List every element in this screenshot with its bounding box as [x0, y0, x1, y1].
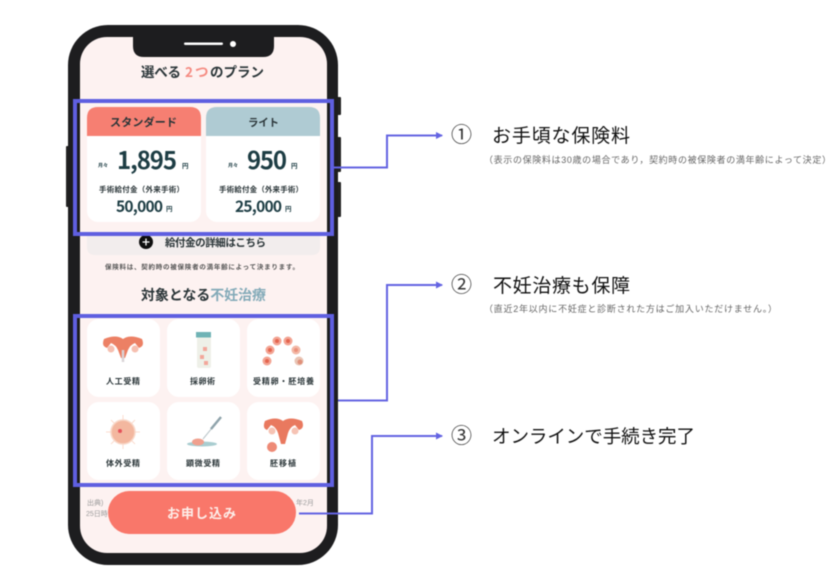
arrow: plans to point 1	[334, 136, 442, 168]
tile: in vitro fertilization	[87, 402, 160, 480]
phone side buttons	[66, 97, 341, 217]
point 3: ③	[451, 425, 472, 448]
title: つ	[195, 61, 208, 81]
phone notch	[133, 37, 274, 57]
standard monthly price: 月々	[98, 162, 108, 169]
icon: egg cell	[106, 415, 140, 449]
panel: standard plan	[87, 107, 201, 222]
icon: embryo stages	[262, 336, 304, 366]
tile: egg retrieval	[167, 319, 240, 397]
standard monthly price	[98, 141, 189, 176]
light monthly price: 月々	[228, 162, 238, 169]
light benefit label: 手術給付金（外来手術）	[219, 184, 303, 195]
point 1: ①	[451, 124, 472, 147]
standard benefit label: 手術給付金（外来手術）	[99, 184, 184, 195]
source note	[86, 498, 314, 518]
apply button	[108, 491, 296, 534]
source note: 25日時	[86, 510, 108, 518]
point 2 heading: 不妊治療も保障	[493, 275, 630, 297]
light plan header	[206, 107, 320, 136]
label: 採卵術	[190, 376, 215, 387]
heading: covered treatments: 対象となる不妊治療	[141, 285, 266, 305]
label: 受精卵・胚培養	[253, 376, 314, 387]
title: 2	[185, 61, 193, 81]
icon: plus	[139, 235, 153, 249]
point 2: ②	[451, 274, 472, 297]
phone mockup	[66, 25, 341, 565]
panel: light plan	[206, 107, 320, 222]
source note: 出典)	[87, 498, 103, 507]
title: 選べる	[141, 61, 181, 81]
standard plan header	[87, 107, 201, 136]
point 3 heading: オンラインで手続き完了	[492, 426, 695, 447]
light plan name: ライト	[248, 115, 279, 130]
tile: embryo transfer	[247, 402, 320, 480]
apply button: お申し込み	[167, 503, 236, 522]
benefit details bar	[87, 234, 320, 255]
icon: uterus	[103, 336, 143, 362]
source note: 年2月	[296, 498, 314, 507]
phone body	[68, 25, 338, 565]
standard monthly price: 1,895	[117, 141, 177, 176]
icon: test tube	[196, 332, 211, 368]
light monthly price: 950	[247, 141, 287, 176]
arrow: treatments to point 2	[338, 285, 442, 400]
label: 体外受精	[106, 458, 140, 469]
highlight box: plans	[75, 101, 332, 234]
icon: uterus with embryo	[264, 418, 303, 452]
light monthly price	[228, 141, 298, 176]
benefit details bar: 給付金の詳細はこちら	[165, 235, 266, 250]
point 1	[451, 124, 831, 165]
standard monthly price: 円	[182, 160, 189, 170]
light benefit amount: 25,000	[235, 195, 282, 217]
icon: micro injection	[187, 417, 221, 446]
tile: microinsemination	[167, 402, 240, 480]
arrow: button to point 3	[299, 436, 442, 514]
standard benefit amount: 50,000	[116, 195, 163, 217]
point 3	[451, 425, 695, 448]
point 1 note: （表示の保険料は30歳の場合であり，契約時の被保険者の満年齢によって決定）	[484, 154, 831, 165]
point 2	[451, 274, 777, 314]
phone screen	[80, 37, 327, 553]
premium note: 保険料は、契約時の被保険者の満年齢によって決まります。	[105, 262, 299, 271]
title	[141, 61, 264, 81]
standard benefit amount: 円	[166, 203, 173, 213]
label: 顕微受精	[186, 458, 220, 469]
standard plan name: スタンダード	[110, 114, 177, 130]
label: 人工受精	[106, 376, 140, 387]
point 2 note: （直近2年以内に不妊症と診断された方はご加入いただけません。）	[484, 303, 777, 314]
panel: treatment tiles	[87, 319, 320, 480]
light benefit amount: 円	[285, 203, 292, 213]
point 1 heading: お手頃な保険料	[492, 125, 630, 147]
tile: embryo culture	[247, 319, 320, 397]
title: のプラン	[210, 61, 264, 81]
light monthly price: 円	[291, 160, 298, 170]
highlight box: treatments	[75, 316, 332, 485]
tile: artificial insemination	[87, 319, 160, 397]
label: 胚移植	[270, 458, 296, 469]
